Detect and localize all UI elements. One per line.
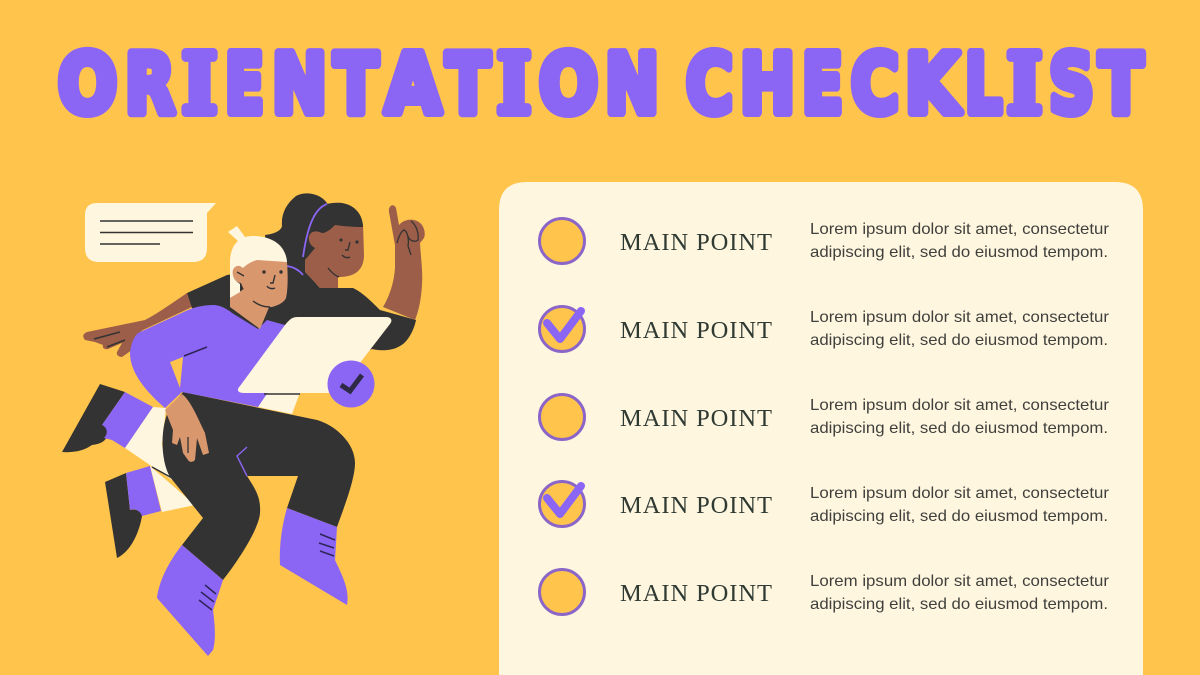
title: O [539,38,598,132]
neck and head [230,285,270,329]
checklist item 2 [540,306,1110,352]
icon: speech bubble [85,203,216,262]
checklist item 2: Lorem ipsum dolor sit amet, consectetur [810,309,1110,326]
checklist item 1 [540,218,1110,264]
checklist item 4: MAIN POINT [620,492,772,519]
title: L [965,38,1002,132]
checklist item 4 [540,482,1110,526]
title: H [740,38,795,132]
checklist item 2: MAIN POINT [620,317,772,344]
checklist item 5: Lorem ipsum dolor sit amet, consectetur [810,573,1110,590]
checklist item 3: MAIN POINT [620,405,772,432]
checklist item 4: adipiscing elit, sed do eiusmod tempom. [810,508,1108,525]
tablet [238,317,391,394]
ponytail [265,193,345,285]
title: K [905,38,962,132]
checklist item 3: Lorem ipsum dolor sit amet, consectetur [810,397,1110,414]
checklist item 5: adipiscing elit, sed do eiusmod tempom. [810,596,1108,613]
title: I [1007,36,1042,132]
hand [165,394,209,462]
checklist item 5 [540,570,1110,614]
back feet [62,384,195,558]
checklist item 1: Lorem ipsum dolor sit amet, consectetur [810,221,1110,238]
title: O [58,38,117,132]
checklist item 1: MAIN POINT [620,229,772,256]
title: N [272,38,327,132]
panel: checklist [499,182,1143,675]
title: T [334,38,378,132]
icon: check badge [328,360,374,408]
title: C [686,38,733,132]
torso and arm [130,305,300,408]
title: I [182,36,217,132]
right boot [280,508,348,605]
raised arm [383,205,425,320]
person: back figure [83,193,425,380]
title: E [225,38,264,132]
title: C [851,38,899,132]
title: I [497,36,531,132]
title: R [125,38,175,132]
title: T [446,38,490,132]
pointing arm [83,293,192,357]
face [305,222,364,288]
title: S [1049,38,1094,132]
title: A [385,38,441,132]
title: E [802,38,843,132]
person: front figure [62,226,355,656]
trousers [162,392,355,580]
checklist item 3 [540,394,1110,440]
checklist item 3: adipiscing elit, sed do eiusmod tempom. [810,420,1108,437]
hair [304,203,363,258]
checklist item 4: Lorem ipsum dolor sit amet, consectetur [810,485,1110,502]
sock under tablet [258,390,301,414]
checklist item 2: adipiscing elit, sed do eiusmod tempom. [810,332,1108,349]
title: N [605,38,659,132]
title: T [1099,38,1143,132]
left boot [157,545,223,656]
checklist item 5: MAIN POINT [620,580,772,607]
black top [187,268,416,380]
illustration: two people with tablet [62,193,425,656]
checklist item 1: adipiscing elit, sed do eiusmod tempom. [810,244,1108,261]
